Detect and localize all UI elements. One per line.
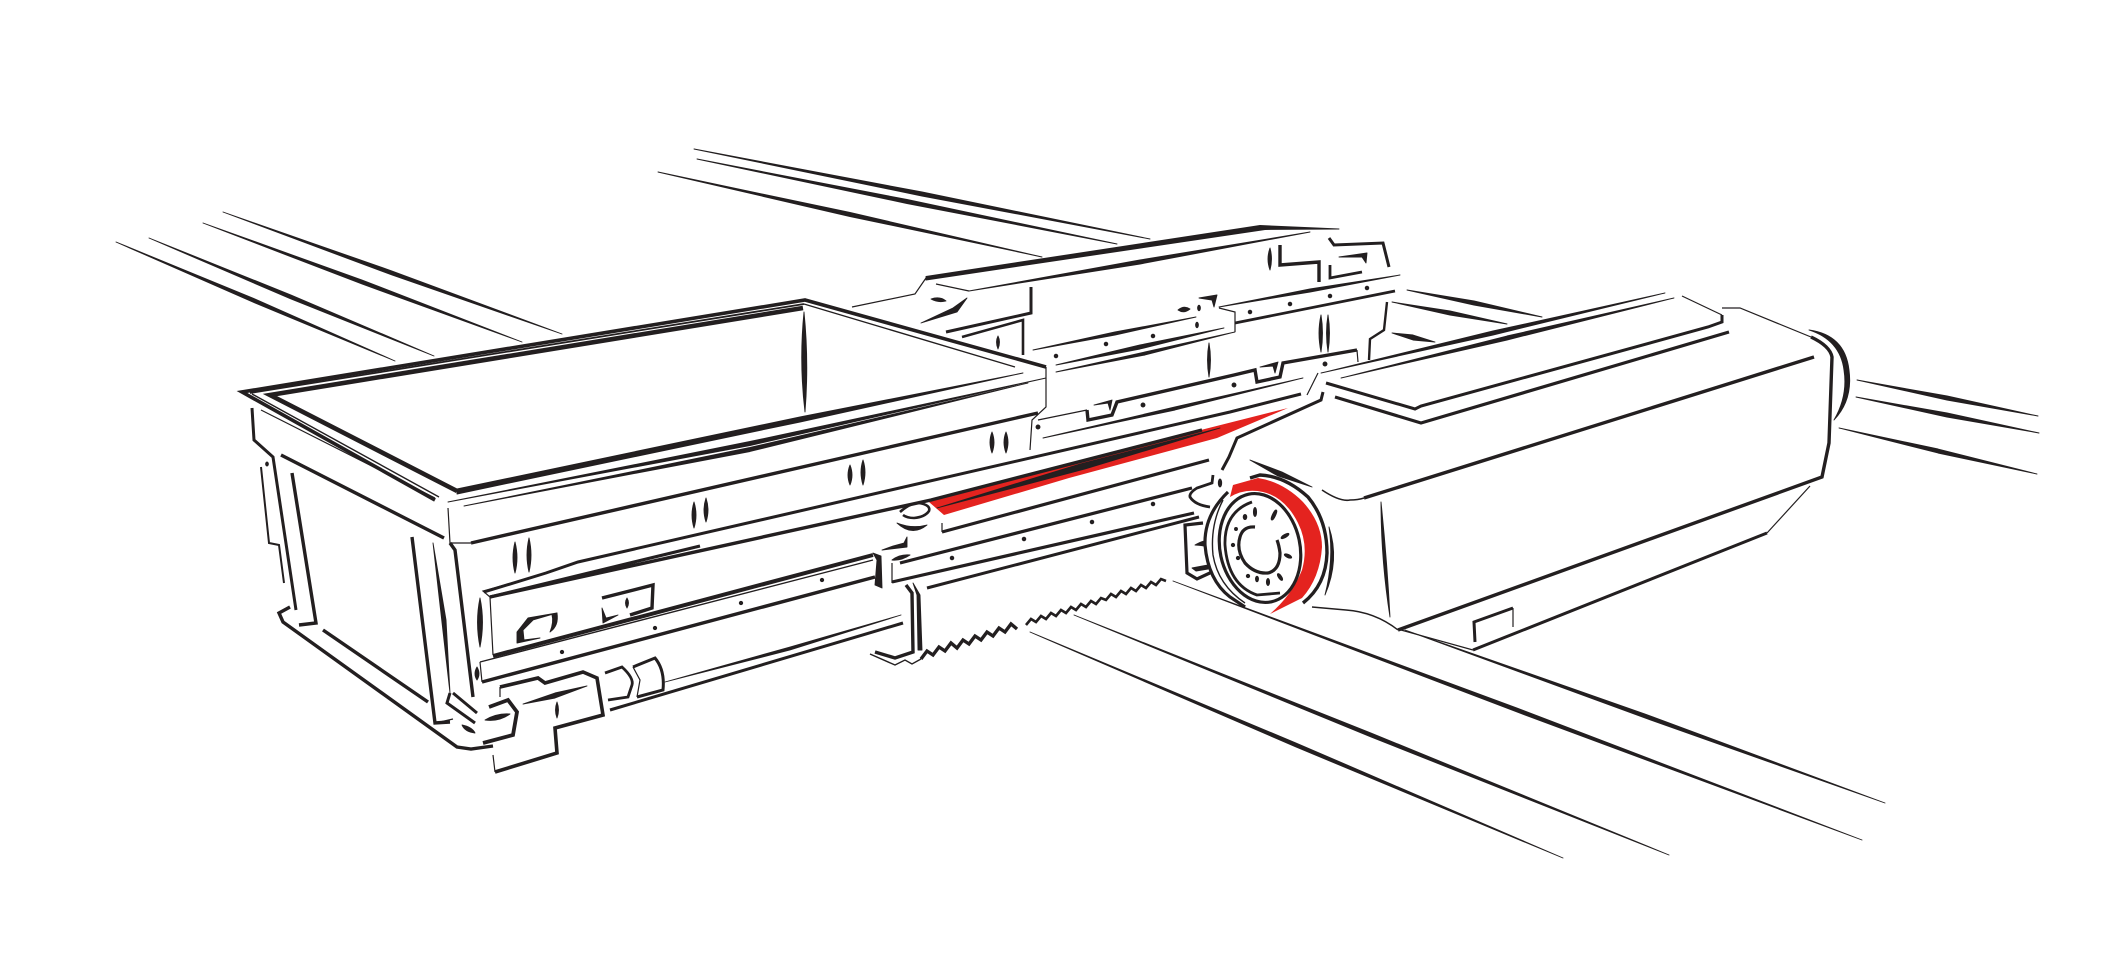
red accent stripe (929, 408, 1288, 515)
right unit lid (1321, 293, 1729, 423)
back unit lower rail (1036, 350, 1358, 438)
right unit base (1401, 486, 1810, 650)
corner bracket (483, 658, 663, 772)
right unit body (1222, 308, 1850, 630)
neck clip and side bracket (1185, 475, 1222, 579)
back unit rails (1033, 275, 1400, 377)
box left side panel (252, 408, 493, 749)
stripe inner line (937, 428, 1220, 508)
rails: behind machine (658, 149, 1542, 342)
rails: front (1030, 581, 1885, 858)
saw post (875, 583, 922, 658)
back unit top (852, 226, 1389, 355)
rails: right (1839, 380, 2039, 474)
dial wheel (1205, 475, 1334, 614)
box front bands (448, 394, 1301, 597)
open box rim (242, 300, 1046, 506)
saw teeth edge (870, 579, 1166, 665)
rails: upper left (116, 212, 562, 361)
drawer front with handles (475, 546, 903, 710)
center rail and clips (882, 460, 1209, 588)
